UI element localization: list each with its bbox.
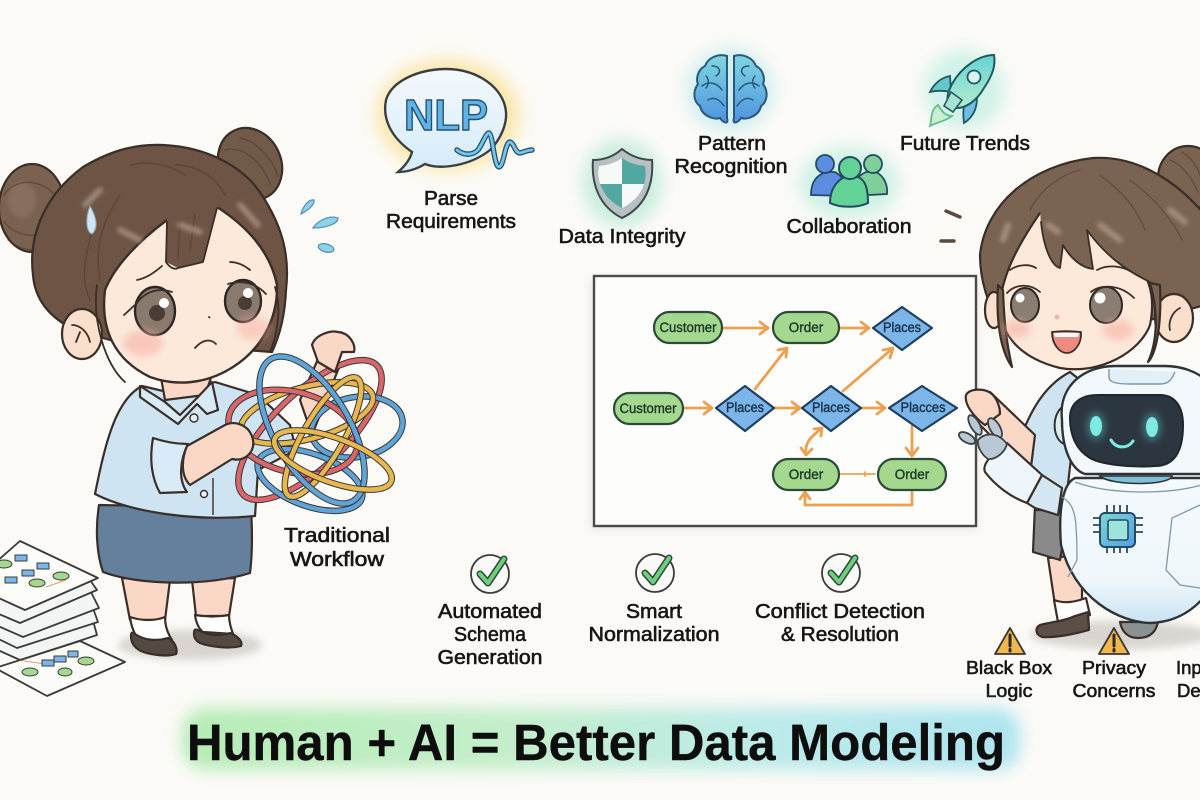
label: Collaboration: Collaboration [786,216,912,238]
head [1062,366,1200,474]
glowing eyes and smile [1087,412,1161,447]
flame [930,105,952,126]
node: Placces right: Placces [900,400,946,415]
node: Places centre [802,386,861,431]
fringe [166,170,250,268]
panel shadow [590,278,978,530]
label: Schema [454,624,527,646]
label: Parse Requirements: Parse [424,188,478,210]
face screen [1070,395,1183,467]
shield body [593,149,652,218]
left lobe [694,55,727,123]
node: Order bottom left [773,459,839,490]
blush [1003,320,1031,338]
feature: Conflict Detection & Resolution [755,554,925,646]
node: Customer top: Customer [660,320,717,335]
label: Black Box [966,657,1053,678]
skirt [97,505,252,583]
character: happy girl [966,146,1200,649]
label: Logic [986,680,1032,701]
bottom sheet [0,641,125,696]
neck [1100,476,1172,484]
arm [984,443,1062,515]
body [1060,478,1200,623]
leg, sock and shoe [1036,555,1090,637]
node: Order bottom right: Order [895,467,930,482]
shadow under girl [118,630,262,660]
legs [122,578,241,655]
node: Placces right [889,386,957,431]
icon: collaboration people [799,147,899,219]
feature: Automated Schema Generation [438,555,542,669]
brows [137,262,250,280]
bubble glow [376,59,520,171]
sweat drops [301,200,338,254]
node: Places top: Places [883,320,921,335]
panel frame [594,276,976,526]
hair strands and shine [998,152,1200,367]
hair back [980,158,1200,325]
icon: shield [582,139,662,227]
label: Pattern Recognition: Pattern [698,133,766,155]
panel: data model diagram [590,276,978,530]
eye: left [1007,286,1040,322]
bubble [385,69,506,172]
node: Order bottom right [878,459,946,490]
arm behind bands [300,350,340,435]
label: Generation [438,647,542,669]
node: Order top: Order [789,320,824,335]
label: Smart [626,601,682,623]
open mouth [1052,331,1081,353]
collar [140,382,218,424]
eye: left [124,287,175,335]
face [1000,213,1152,369]
warning: clipped label at right edge: De [1177,680,1200,701]
ear [62,309,102,359]
label: Conflict Detection [755,601,925,623]
icon: stack of paper diagrams [0,541,125,696]
gripper hand [957,413,1007,459]
character: robot [957,366,1200,638]
node: Places left [716,386,774,431]
hair strands and shine [85,163,278,382]
wheel [1120,622,1158,638]
label: Parse Requirements: Requirements [386,211,516,233]
icon: brain [686,48,774,132]
label: Traditional Workflow: Traditional [284,525,390,547]
icon: rocket [924,50,1004,130]
shirt [1018,372,1080,510]
node: Customer middle [614,393,683,424]
shield glow [582,139,662,227]
nose [1054,314,1060,320]
node: Places left: Places [726,400,764,415]
head top plate [1109,369,1175,384]
brain folds [702,66,759,106]
eye: right [1090,287,1134,323]
top sheet [0,541,98,610]
label: Privacy [1082,657,1147,678]
left person [811,172,848,196]
NLP word: NLP [404,91,488,140]
right person [850,172,887,196]
shadow under girl and robot [1030,621,1200,649]
title text: Human + AI = Better Data Modeling [187,714,1005,771]
arrows [685,322,918,505]
node: Customer middle: Customer [620,401,677,416]
stacked sheets [0,580,99,660]
sleeve [151,438,188,493]
label: Future Trends: Future Trends [900,133,1030,155]
character: stressed girl with tangled bands [0,117,408,660]
body panels [1062,482,1200,588]
node: Customer top [654,312,722,343]
hair back [32,145,287,352]
eye: right [225,280,266,322]
forearm and hand [183,423,253,485]
right ear [1155,294,1193,342]
rocket glow [924,50,1004,130]
label: Pattern Recognition: Recognition [674,156,788,178]
shirt [95,382,296,518]
label: & Resolution [781,624,899,646]
warning: Black Box Logic [966,628,1053,701]
left ear [985,292,1003,328]
node: Places centre: Places [812,400,850,415]
label: Normalization [588,624,720,646]
people glow [799,147,899,219]
hair clip [87,206,96,234]
head side dome [1055,406,1064,444]
icon: warning triangle [1099,628,1129,654]
nose and mouth [195,317,216,348]
label: Automated [438,601,542,623]
warning: Privacy Concerns [1072,628,1156,701]
rocket body [948,55,995,108]
title glow [182,708,1020,770]
icon: NLP speech bubble [376,59,532,172]
bun [1158,146,1200,210]
neck [160,372,212,400]
chip [1093,505,1143,553]
right lobe [734,55,767,123]
node: Order bottom left: Order [789,467,824,482]
icon: warning triangle [995,628,1025,654]
label: Concerns [1072,680,1156,701]
fringe [1040,185,1185,282]
feature: Smart Normalization [588,554,720,646]
accent dashes near right girl [941,211,960,241]
label: Data Integrity: Data Integrity [558,226,686,248]
window and nozzle [968,70,980,84]
tangled bands [217,339,408,523]
sound wave [457,133,532,167]
node: Order top [773,312,839,343]
brain glow [686,48,774,132]
face [104,207,277,383]
shirt buttons and seam [190,414,213,515]
icon: check [822,554,860,592]
node: Places top [873,307,932,350]
forearm [975,392,1035,475]
title with gradient glow [182,708,1020,771]
icon: check [471,555,509,593]
top hand [312,332,354,372]
skirt [1033,505,1070,560]
blush [123,330,163,356]
icon: check [636,554,674,592]
label: Traditional Workflow: Workflow [290,549,385,571]
fins [930,76,951,92]
brows [1010,265,1132,272]
hand [966,390,1000,425]
centre person [830,177,868,207]
hair buns [0,117,294,252]
